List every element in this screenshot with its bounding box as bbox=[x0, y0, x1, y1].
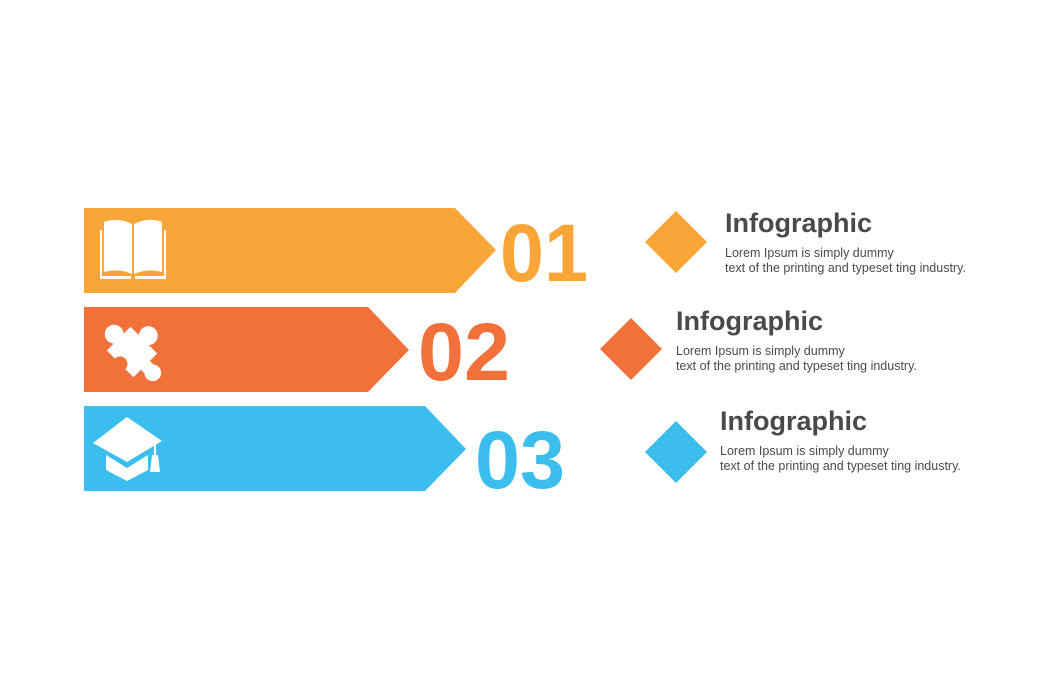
text block 3: Lorem Ipsum is simply dummy bbox=[720, 444, 889, 458]
number 02: 02 bbox=[418, 307, 510, 398]
number 03: 03 bbox=[475, 415, 565, 506]
text block 3 bbox=[720, 406, 961, 473]
text block 2 bbox=[676, 306, 917, 373]
bar 2 bbox=[84, 304, 409, 396]
text block 3: Infographic bbox=[720, 406, 867, 436]
bar 3 bbox=[84, 406, 466, 491]
text block 1: Infographic bbox=[725, 208, 872, 238]
text block 2: text of the printing and typeset ting industry. bbox=[676, 359, 917, 373]
text block 1: text of the printing and typeset ting industry. bbox=[725, 261, 966, 275]
diamond 3 bbox=[645, 421, 707, 483]
bar 1 bbox=[84, 208, 496, 293]
icon: book bbox=[100, 220, 166, 279]
text block 1 bbox=[725, 208, 966, 275]
text block 1: Lorem Ipsum is simply dummy bbox=[725, 246, 894, 260]
diamond 2 bbox=[600, 318, 662, 380]
text block 2: Lorem Ipsum is simply dummy bbox=[676, 344, 845, 358]
diamond 1 bbox=[645, 211, 707, 273]
icon: graduation cap bbox=[93, 417, 162, 481]
icon: puzzle bbox=[90, 304, 182, 396]
text block 3: text of the printing and typeset ting industry. bbox=[720, 459, 961, 473]
text block 2: Infographic bbox=[676, 306, 823, 336]
number 01: 01 bbox=[500, 208, 588, 299]
